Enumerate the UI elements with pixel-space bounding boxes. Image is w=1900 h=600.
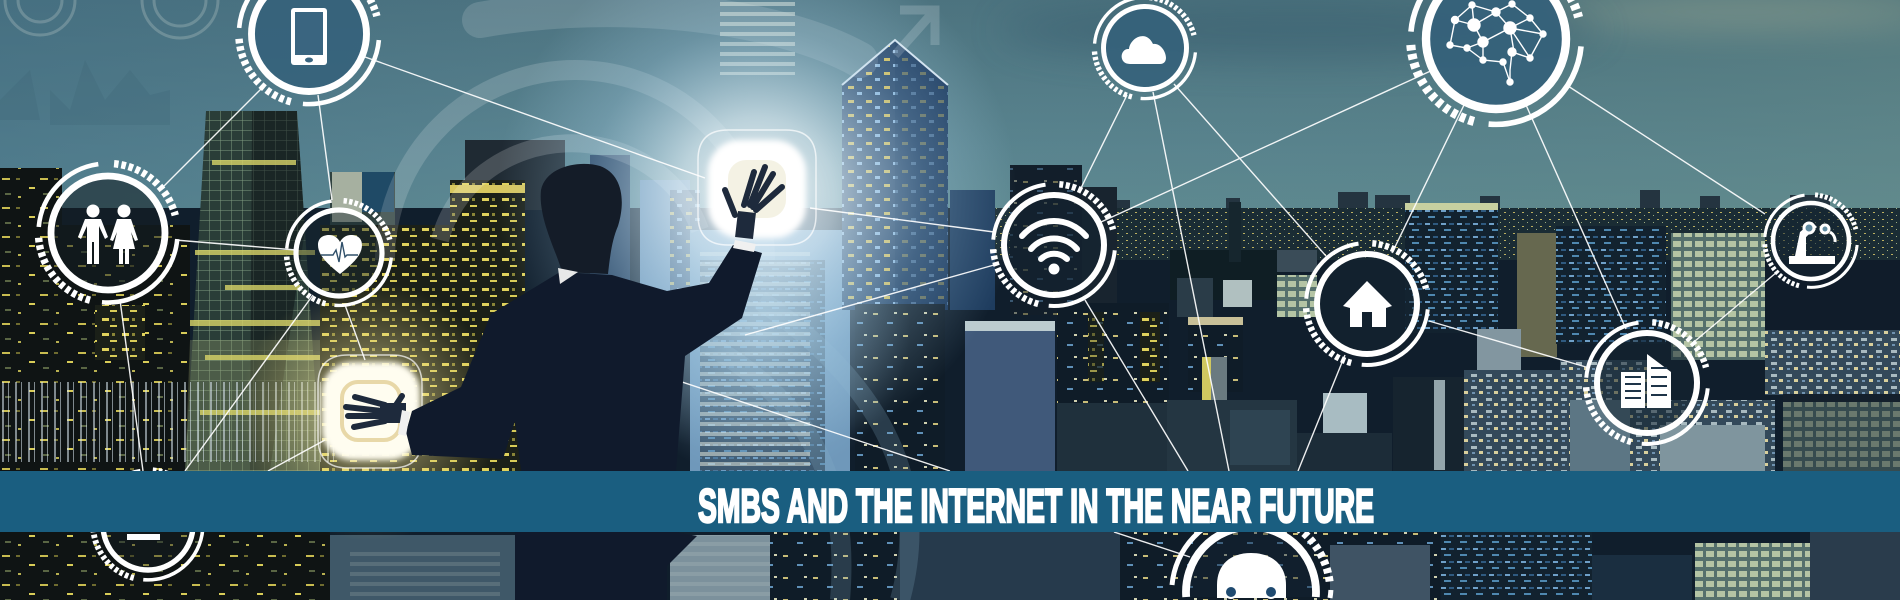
icon: house	[1343, 281, 1392, 327]
touch pad: top	[698, 130, 816, 245]
man: head	[541, 164, 622, 274]
man in suit silhouette	[346, 164, 782, 600]
node: car	[1172, 513, 1331, 598]
icon: neural brain	[1447, 1, 1546, 85]
icon: robot arm	[1789, 222, 1835, 264]
title text: SMBS AND THE INTERNET IN THE NEAR FUTURE	[698, 479, 1374, 532]
node: wifi	[993, 184, 1115, 306]
distant lit skyline	[950, 208, 1900, 260]
sky background	[0, 0, 1900, 300]
icon: wifi	[1022, 221, 1086, 273]
man: shirt cuffs	[398, 240, 756, 436]
node: health	[287, 201, 391, 305]
man: collar	[558, 268, 578, 284]
node: robot arm	[1765, 195, 1857, 287]
node: lower-left laptop	[93, 470, 203, 580]
icon: smartphone	[291, 8, 327, 65]
title banner	[0, 471, 1900, 532]
banner bar	[0, 471, 1900, 532]
icon: city buildings	[1621, 354, 1671, 408]
man: raised hand	[725, 167, 782, 238]
node: cloud	[1094, 0, 1195, 99]
touch pad: bottom	[318, 355, 422, 468]
node: people	[39, 164, 177, 303]
icon: man and woman	[78, 204, 138, 264]
man: torso and arms	[406, 245, 762, 600]
network connection lines	[120, 57, 1777, 557]
man: lower hand	[346, 396, 406, 427]
icon: heart with pulse	[318, 235, 362, 274]
light glows	[240, 0, 1017, 541]
icon: cloud	[1122, 36, 1166, 64]
node: buildings	[1586, 322, 1708, 444]
icon: car	[1217, 553, 1286, 598]
node: smartphone	[239, 0, 379, 104]
node: home	[1306, 243, 1428, 365]
node: brain	[1411, 0, 1581, 124]
icon: laptop	[127, 534, 160, 540]
decorative light arcs and stripes	[0, 0, 935, 600]
